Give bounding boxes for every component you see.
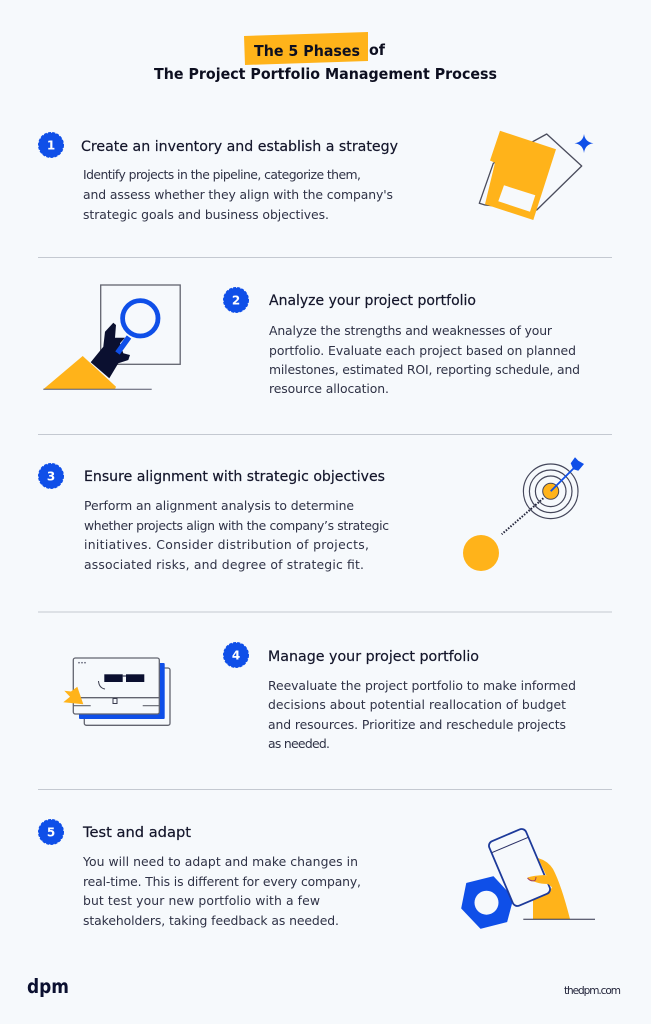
badge 2: 2 <box>232 294 240 308</box>
heading 1: Create an inventory and establish a strategy <box>81 139 398 155</box>
text block 3: whether projects align with the company’s strategic <box>84 518 389 533</box>
title: of <box>369 41 385 59</box>
badge 1: 1 <box>47 138 55 152</box>
text block 2 <box>269 323 580 396</box>
heading 4: Manage your project portfolio <box>268 649 479 665</box>
text block 4: Reevaluate the project portfolio to make informed <box>268 678 576 693</box>
icon: hand holding phone with hex nut <box>462 827 595 928</box>
icon: folder and paper <box>479 131 594 220</box>
badge 5: 5 <box>47 826 55 840</box>
text block 5: You will need to adapt and make changes in <box>82 854 358 869</box>
icon: target with arrow <box>463 457 584 571</box>
text block 4: decisions about potential reallocation of budget <box>268 697 566 712</box>
text block 2: milestones, estimated ROI, reporting schedule, and <box>269 362 580 377</box>
badge 2 <box>224 288 248 312</box>
title: The Project Portfolio Management Process <box>154 65 497 83</box>
badge 1 <box>39 133 63 157</box>
text block 5 <box>82 854 361 928</box>
badge 3: 3 <box>47 470 55 484</box>
text block 3: Perform an alignment analysis to determine <box>84 498 354 513</box>
heading 2: Analyze your project portfolio <box>269 293 476 309</box>
text block 3: associated risks, and degree of strategic fit. <box>84 557 364 572</box>
text block 5: but test your new portfolio with a few <box>83 893 320 908</box>
text block 4: as needed. <box>268 736 330 751</box>
text block 5: stakeholders, taking feedback as needed. <box>83 913 339 928</box>
text block 1: Identify projects in the pipeline, categorize them, <box>83 167 361 182</box>
website url: thedpm.com <box>564 985 621 997</box>
badge 3 <box>39 464 63 488</box>
text block 5: real-time. This is different for every company, <box>83 874 361 889</box>
text block 2: portfolio. Evaluate each project based on planned <box>269 343 576 358</box>
text block 1: and assess whether they align with the company's <box>83 187 393 202</box>
panel: phase 2 <box>43 285 580 396</box>
text block 4: and resources. Prioritize and reschedule projects <box>268 717 566 732</box>
text block 4 <box>268 678 576 751</box>
heading 5: Test and adapt <box>82 825 191 841</box>
text block 3: initiatives. Consider distribution of projects, <box>84 537 369 552</box>
badge 4 <box>224 643 248 667</box>
heading 3: Ensure alignment with strategic objectives <box>84 469 385 485</box>
text block 1 <box>83 167 393 222</box>
text block 3 <box>84 498 389 572</box>
icon: hand with magnifying glass <box>43 285 180 389</box>
title: The 5 Phases <box>254 42 360 60</box>
text block 2: Analyze the strengths and weaknesses of your <box>269 323 553 338</box>
panel: phase 5 <box>39 820 595 928</box>
badge 4: 4 <box>232 648 240 662</box>
text block 2: resource allocation. <box>269 381 389 396</box>
badge 5 <box>39 820 63 844</box>
panel: phase 3 <box>39 457 584 572</box>
panel: phase 1 <box>39 131 593 222</box>
logo: dpm <box>27 975 69 998</box>
title highlight <box>244 32 368 65</box>
text block 1: strategic goals and business objectives. <box>83 207 329 222</box>
title <box>154 32 497 83</box>
icon: stacked browser windows <box>63 658 170 725</box>
panel: phase 4 <box>63 643 576 751</box>
